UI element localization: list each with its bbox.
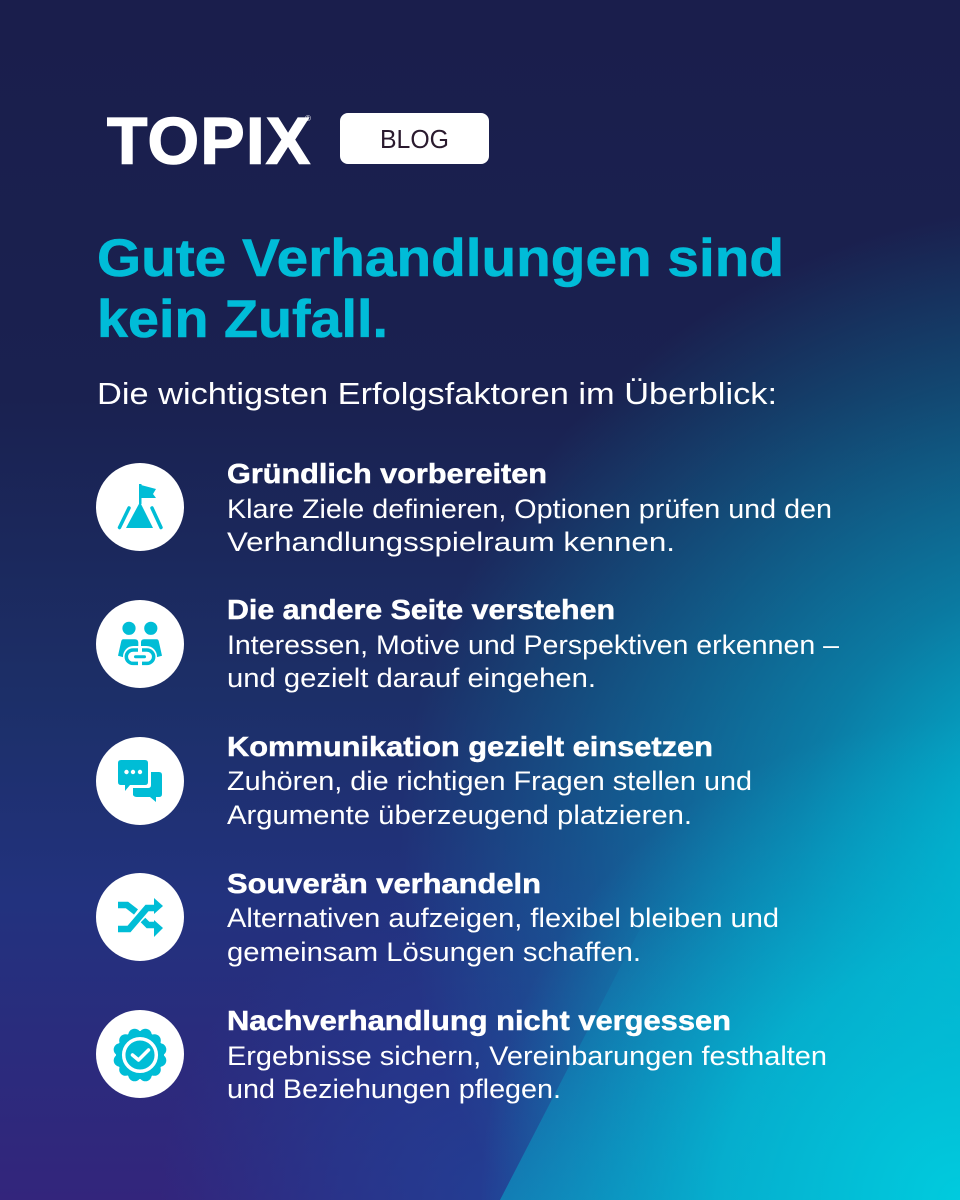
icon: speech bubbles bbox=[96, 737, 184, 825]
text: Gründlich vorbereiten: Gründlich vorbereiten bbox=[227, 458, 547, 489]
title: Gute Verhandlungen sind bbox=[97, 229, 784, 288]
icon: two people linked bbox=[96, 600, 184, 688]
text: Souverän verhandeln: gemeinsam Lösungen schaffen. bbox=[227, 937, 641, 967]
text: Souverän verhandeln bbox=[227, 868, 779, 967]
logo: TOPIX: ® bbox=[305, 114, 311, 123]
logo: TOPIX: TOPIX bbox=[107, 104, 310, 178]
title bbox=[97, 229, 784, 349]
text: Gründlich vorbereiten: Klare Ziele definieren, Optionen prüfen und den bbox=[227, 494, 832, 524]
icon: mountain with flag bbox=[96, 463, 184, 551]
text: Nachverhandlung nicht vergessen bbox=[227, 1005, 827, 1104]
item 1: Gründlich vorbereiten bbox=[96, 458, 832, 557]
text: Gründlich vorbereiten bbox=[227, 458, 832, 557]
text: Nachverhandlung nicht vergessen: und Beziehungen pflegen. bbox=[227, 1074, 561, 1104]
text: Gründlich vorbereiten: Verhandlungsspielraum kennen. bbox=[227, 527, 675, 557]
text: Souverän verhandeln: Alternativen aufzeigen, flexibel bleiben und bbox=[227, 903, 779, 933]
text: Kommunikation gezielt einsetzen: Zuhören, die richtigen Fragen stellen und bbox=[227, 766, 752, 796]
item 4: Souverän verhandeln bbox=[96, 868, 779, 967]
text: Kommunikation gezielt einsetzen: Kommunikation gezielt einsetzen bbox=[227, 731, 713, 762]
item 2: Die andere Seite verstehen bbox=[96, 594, 839, 693]
icon: check badge bbox=[96, 1010, 184, 1098]
text: Souverän verhandeln: Souverän verhandeln bbox=[227, 868, 541, 899]
badge: BLOG bbox=[340, 113, 489, 164]
text: Die andere Seite verstehen: und gezielt darauf eingehen. bbox=[227, 663, 596, 693]
text: Nachverhandlung nicht vergessen: Nachverhandlung nicht vergessen bbox=[227, 1005, 731, 1036]
text: Kommunikation gezielt einsetzen: Argumente überzeugend platzieren. bbox=[227, 800, 692, 830]
text: Die andere Seite verstehen bbox=[227, 594, 839, 693]
text: Die andere Seite verstehen: Die andere Seite verstehen bbox=[227, 594, 615, 625]
item 5: Nachverhandlung nicht vergessen bbox=[96, 1005, 827, 1104]
badge: BLOG: BLOG bbox=[380, 124, 449, 154]
text: Die andere Seite verstehen: Interessen, Motive und Perspektiven erkennen – bbox=[227, 630, 839, 660]
subtitle: Die wichtigsten Erfolgsfaktoren im Überblick: bbox=[97, 376, 777, 411]
title: kein Zufall. bbox=[97, 290, 388, 349]
text: Kommunikation gezielt einsetzen bbox=[227, 731, 752, 830]
text: Nachverhandlung nicht vergessen: Ergebnisse sichern, Vereinbarungen festhalten bbox=[227, 1041, 827, 1071]
icon: crossing arrows bbox=[96, 873, 184, 961]
item 3: Kommunikation gezielt einsetzen bbox=[96, 731, 752, 830]
